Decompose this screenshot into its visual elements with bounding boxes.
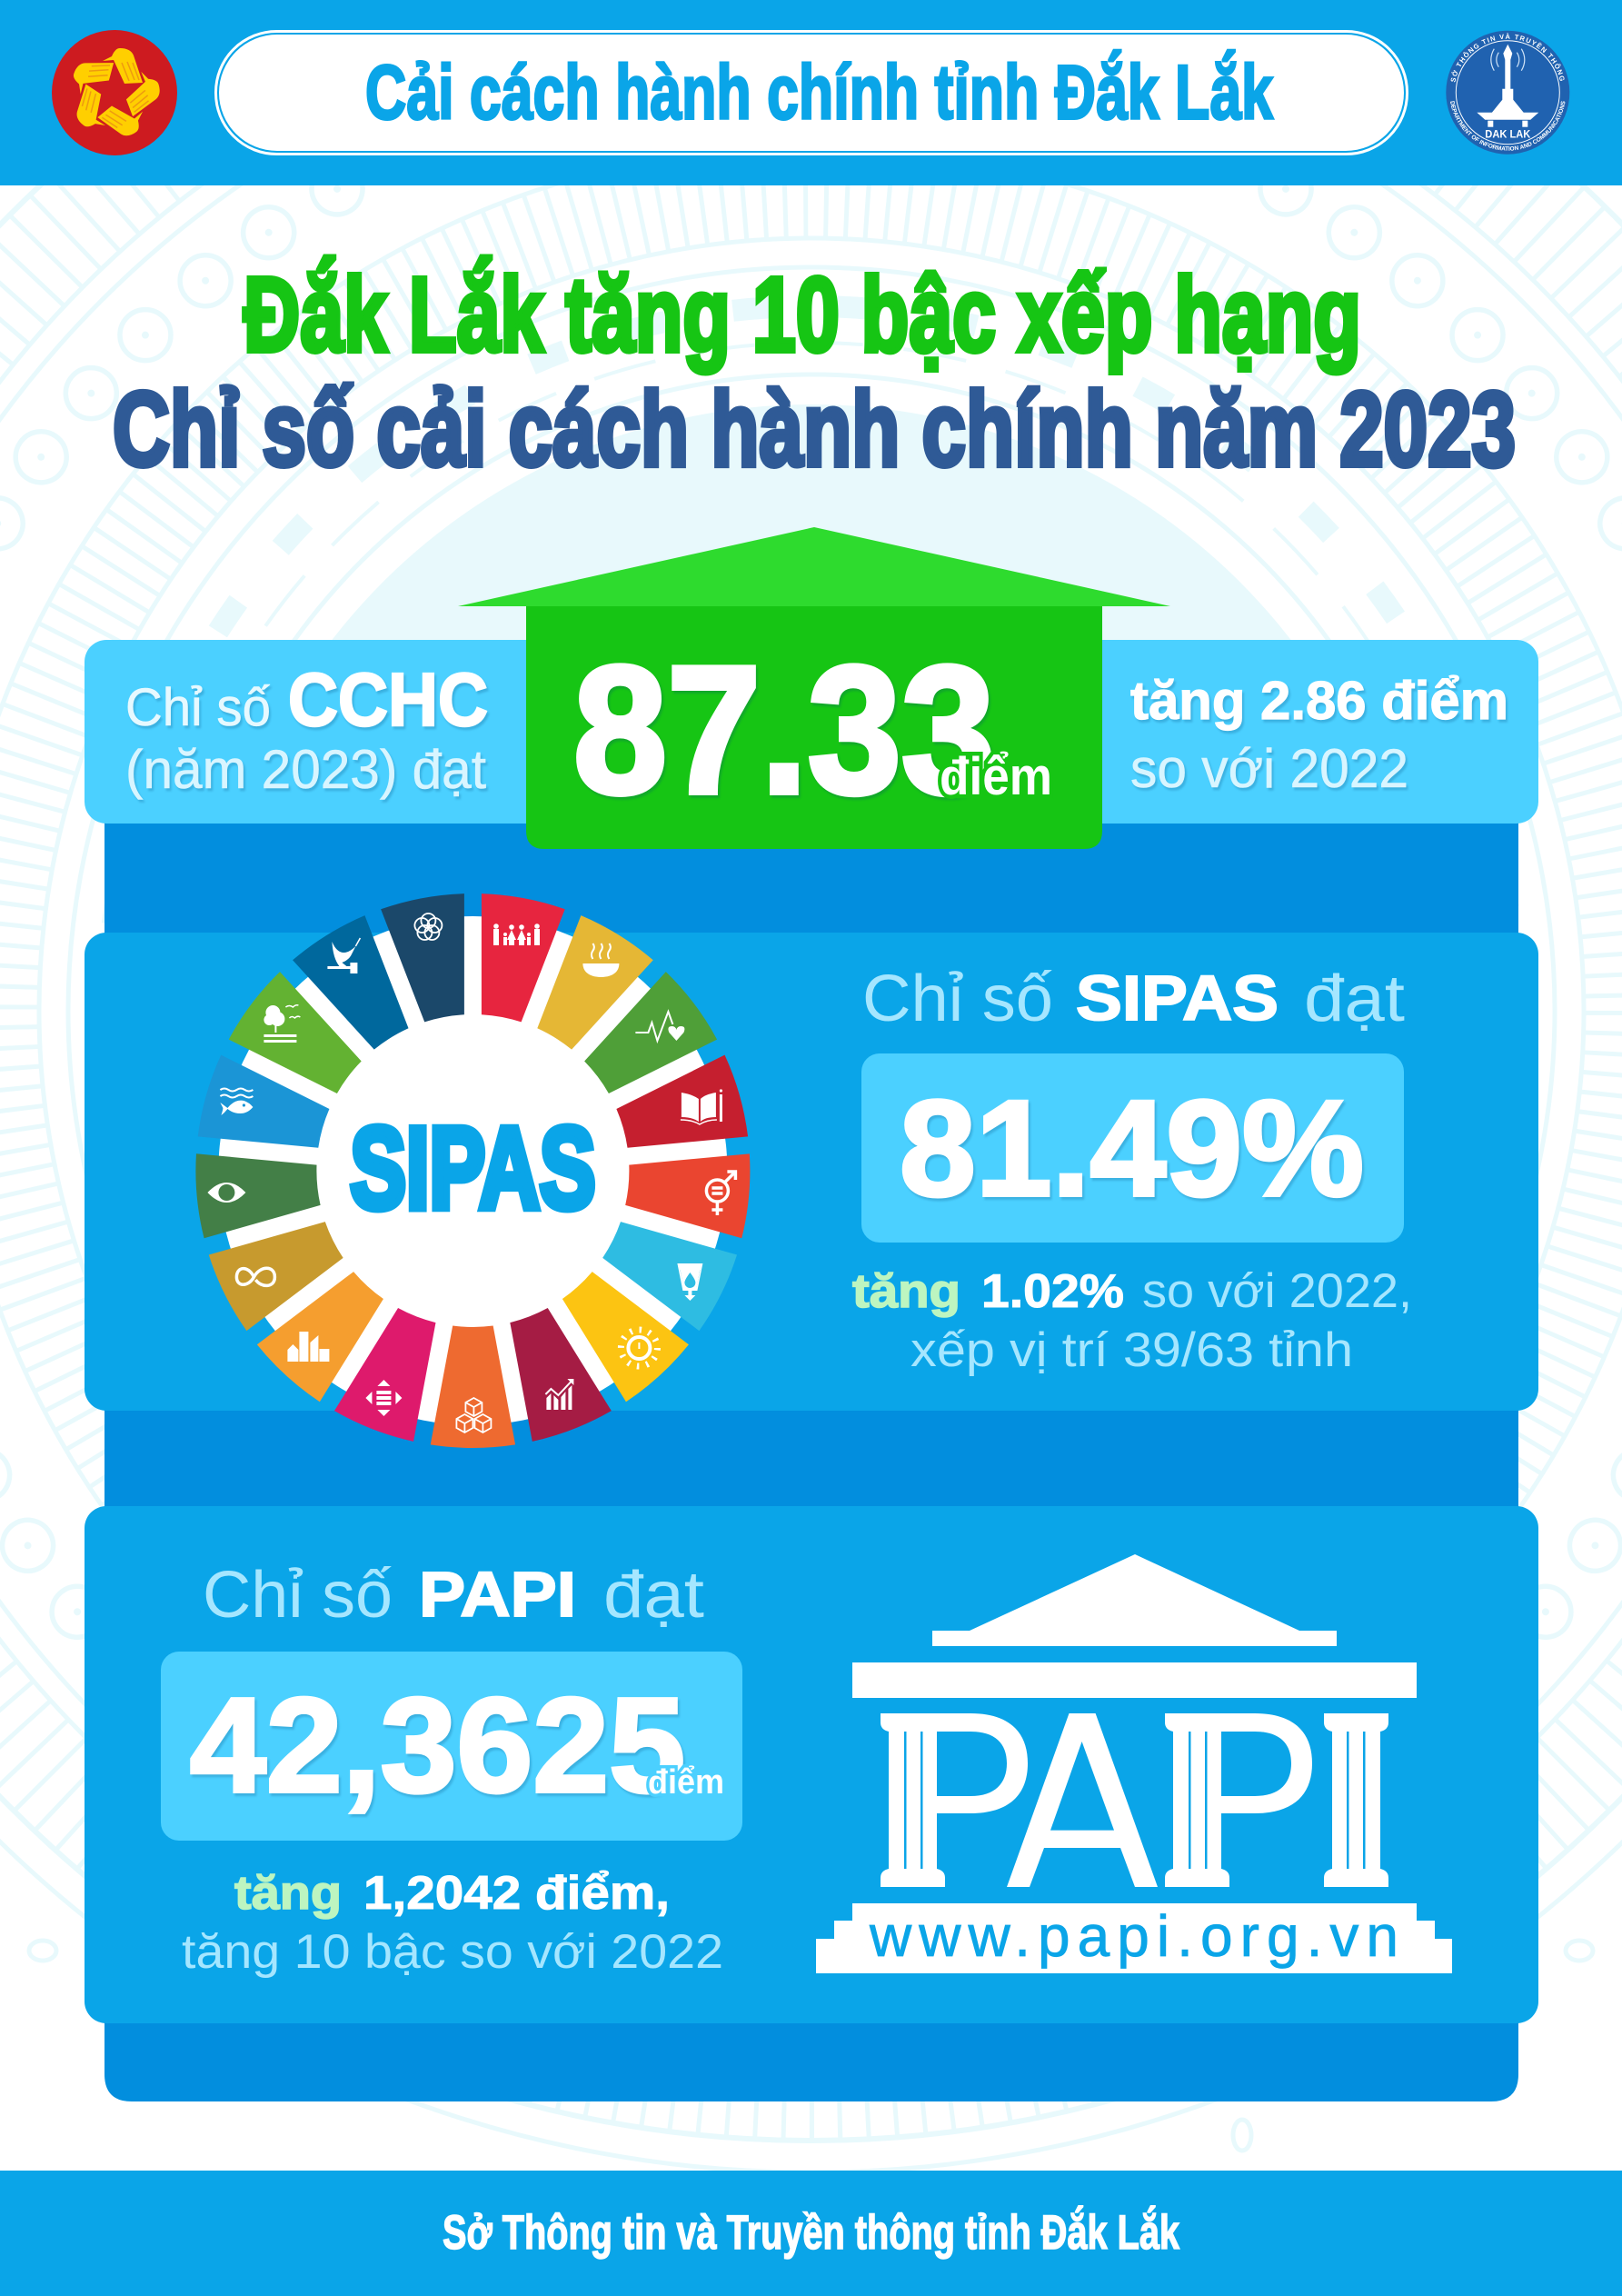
arrow: green up arrow with score [458, 527, 1170, 849]
CCHC right text [1130, 671, 1508, 799]
icon: fish and waves [220, 1089, 253, 1115]
SIPAS heading: đạt [1304, 963, 1405, 1035]
letter P right [1165, 1713, 1312, 1887]
letter A [1007, 1713, 1158, 1887]
PAPI value box: điểm [648, 1763, 724, 1802]
icon: department of information emblem [1446, 31, 1570, 155]
icon: growth chart [545, 1379, 573, 1410]
icon: cubes [456, 1398, 491, 1433]
CCHC left text: CCHC [288, 657, 488, 742]
icon: department of information emblem: SỞ THÔNG TIN VÀ TRUYỀN THÔNG [1450, 33, 1565, 82]
chart: SIPAS SDG wheel [193, 891, 752, 1448]
icon: department of information emblem: DAK LAK [1485, 130, 1531, 141]
PAPI value box [161, 1652, 742, 1841]
footer bar: Sở Thông tin và Truyền thông tỉnh Đắk Lắk [443, 2205, 1179, 2260]
PAPI heading: Chỉ số [203, 1559, 393, 1632]
CCHC left text: (năm 2023) đạt [125, 739, 486, 800]
icon: health pulse [635, 1012, 684, 1041]
icon: linked rings flower [414, 913, 442, 940]
score 87.33: 87.33 [573, 629, 995, 832]
SIPAS note [852, 1264, 1412, 1377]
SIPAS note: tăng [852, 1265, 960, 1318]
letter I [1324, 1713, 1388, 1887]
icon: infinity loop [236, 1268, 274, 1285]
SIPAS note: xếp vị trí 39/63 tỉnh [911, 1323, 1353, 1377]
SIPAS value box [861, 1053, 1404, 1243]
CCHC right text: tăng 2.86 điểm [1130, 671, 1508, 731]
icon: bowl [582, 943, 619, 977]
icon: reduced inequality [365, 1380, 402, 1416]
SIPAS heading: SIPAS [1076, 963, 1279, 1033]
header title pill [216, 31, 1407, 155]
footer bar [0, 2171, 1622, 2296]
main title [113, 255, 1516, 488]
SIPAS heading [862, 963, 1405, 1035]
header title pill: Cải cách hành chính tỉnh Đắk Lắk [365, 49, 1273, 135]
icon: city [287, 1332, 329, 1362]
icon: family [493, 923, 540, 945]
panel: PAPI index [85, 1506, 1538, 2023]
dark blue backing column [104, 800, 1518, 2101]
CCHC left text [125, 657, 488, 800]
PAPI note: 1,2042 điểm, [363, 1867, 670, 1920]
PAPI heading: PAPI [419, 1559, 576, 1630]
PAPI note: tăng [234, 1867, 342, 1920]
icon: book [681, 1089, 722, 1124]
icon: department of information emblem: DEPARTMENT OF INFORMATION AND COMMUNICATIONS [1450, 101, 1565, 151]
score 87.33: điểm [940, 747, 1052, 806]
icon: administrative reform emblem [52, 30, 177, 155]
icon: PAPI temple logo [816, 1554, 1452, 1973]
header bar [0, 0, 1622, 185]
SIPAS note: 1.02% [981, 1265, 1124, 1318]
PAPI value box: 42,3625 [190, 1671, 685, 1821]
PAPI note [182, 1867, 723, 1979]
icon: PAPI temple logo: www.papi.org.vn [869, 1903, 1398, 1969]
stepped base [816, 1903, 1452, 1973]
icon: tree and birds [264, 1005, 300, 1043]
SIPAS wordmark: SIPAS [350, 1103, 595, 1233]
PAPI heading: đạt [603, 1559, 704, 1632]
PAPI note: tăng 10 bậc so với 2022 [182, 1925, 723, 1979]
icon: dove and gavel [327, 938, 360, 973]
icon: eye and globe [207, 1183, 245, 1203]
CCHC left text: Chỉ số [125, 678, 271, 737]
panel: CCHC index [85, 640, 1538, 824]
panel: SIPAS index [85, 891, 1538, 1448]
letter P left [881, 1713, 1028, 1887]
icon: clean energy sun [621, 1330, 657, 1366]
PAPI heading [203, 1559, 704, 1632]
SIPAS value box: 81.49% [900, 1072, 1364, 1224]
SIPAS heading: Chỉ số [862, 963, 1053, 1035]
icon: clean water [677, 1263, 702, 1301]
SIPAS note: so với 2022, [1142, 1264, 1412, 1318]
icon: gender equality [706, 1172, 735, 1215]
CCHC right text: so với 2022 [1130, 738, 1408, 799]
